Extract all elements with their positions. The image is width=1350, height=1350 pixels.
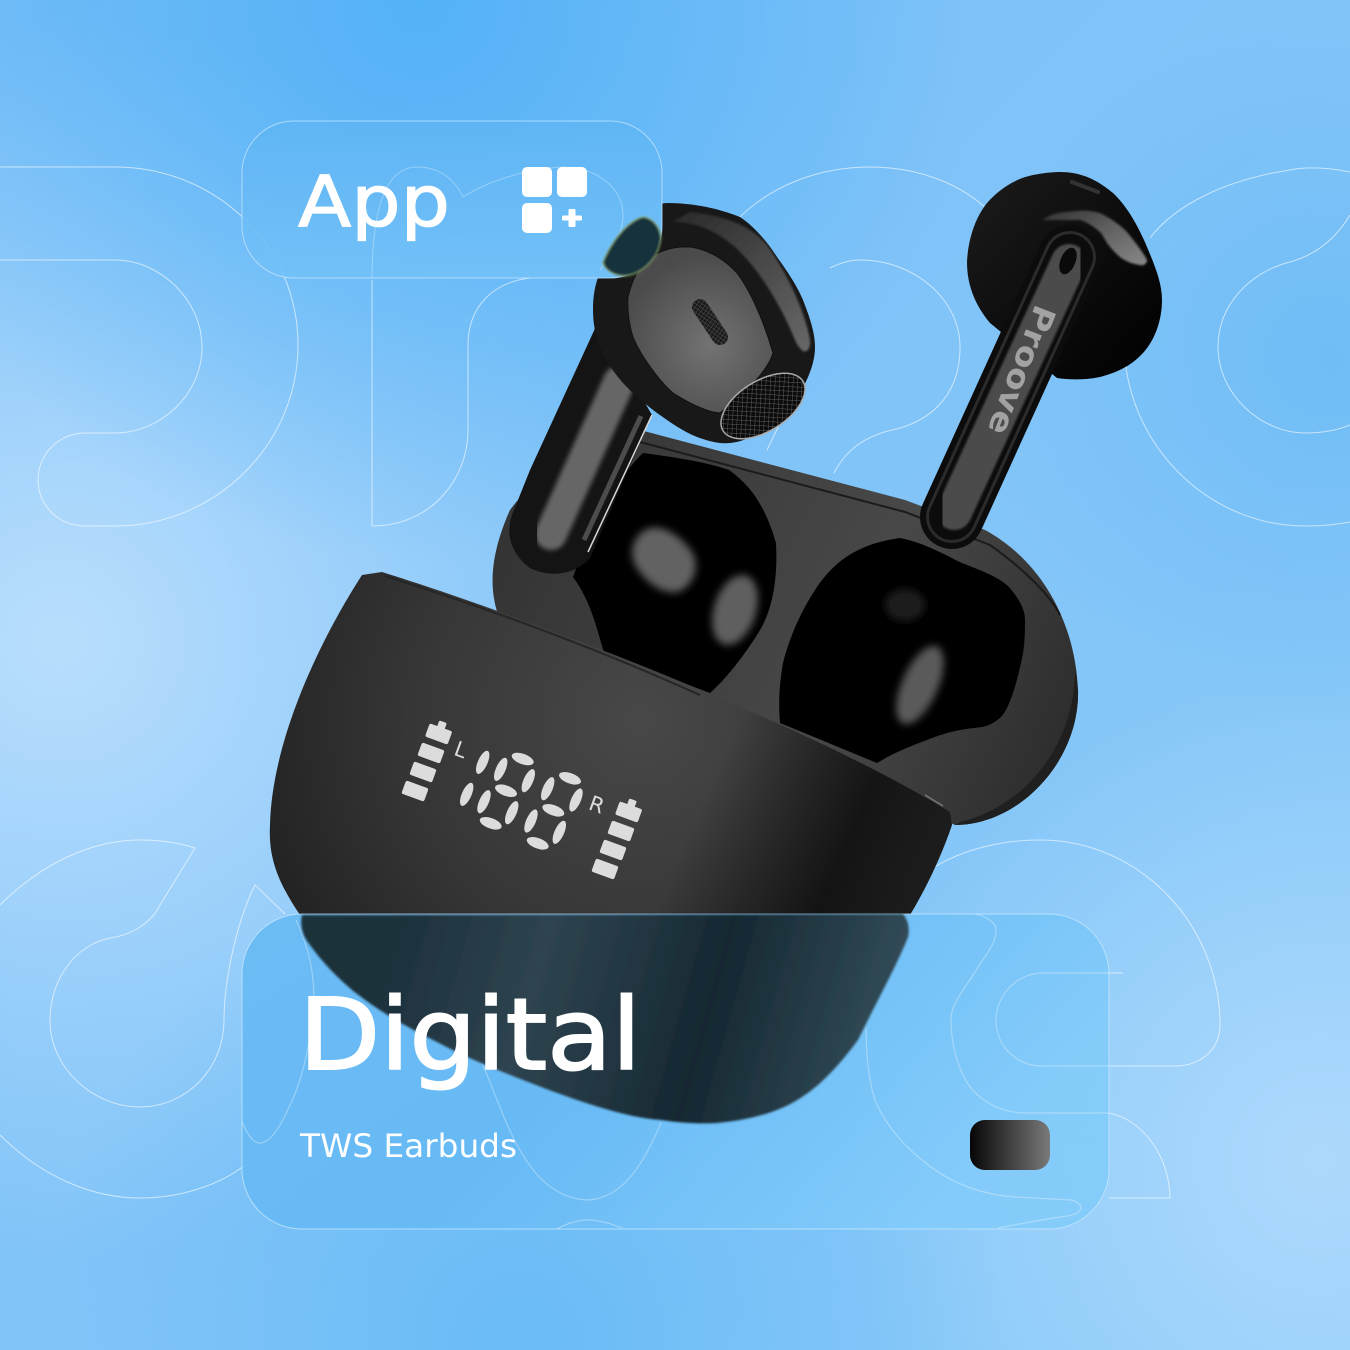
LED battery and digit display [401,718,644,880]
case bottom seen through glass [301,914,909,1123]
wordmark lines through glass [372,167,623,280]
panel: Digital [240,913,1121,1230]
earbud seen through glass [603,217,661,276]
left battery bars [401,742,445,802]
brand label: Proove [980,300,1062,440]
R label: R [586,791,608,819]
TWS Earbuds subtitle: TWS Earbuds [299,1127,517,1165]
panel: App [242,121,662,280]
left battery [425,718,454,745]
Digital title: Digital [299,978,641,1093]
App label: App [298,161,450,243]
left earbud head [593,203,816,452]
charging case front [270,572,952,915]
case lid tray [493,430,1078,825]
right earbud stem [952,245,1080,517]
left earbud stem [509,322,652,574]
L label: L [451,737,471,763]
outlined background wordmark [0,167,1350,1198]
left earbud slot [700,307,720,337]
right battery bars [591,820,635,880]
left earbud mesh [720,372,806,440]
right earbud head [967,172,1162,379]
left earbud inner pad [628,247,773,413]
left cavity [573,453,776,693]
wordmark lines through glass [240,913,1121,1230]
right battery [615,796,644,823]
gradient pill [970,1120,1050,1170]
icon: app grid with plus [522,167,587,233]
right cavity [779,538,1025,763]
right earbud [952,172,1162,517]
left earbud [509,203,816,574]
digit segments [457,749,585,852]
